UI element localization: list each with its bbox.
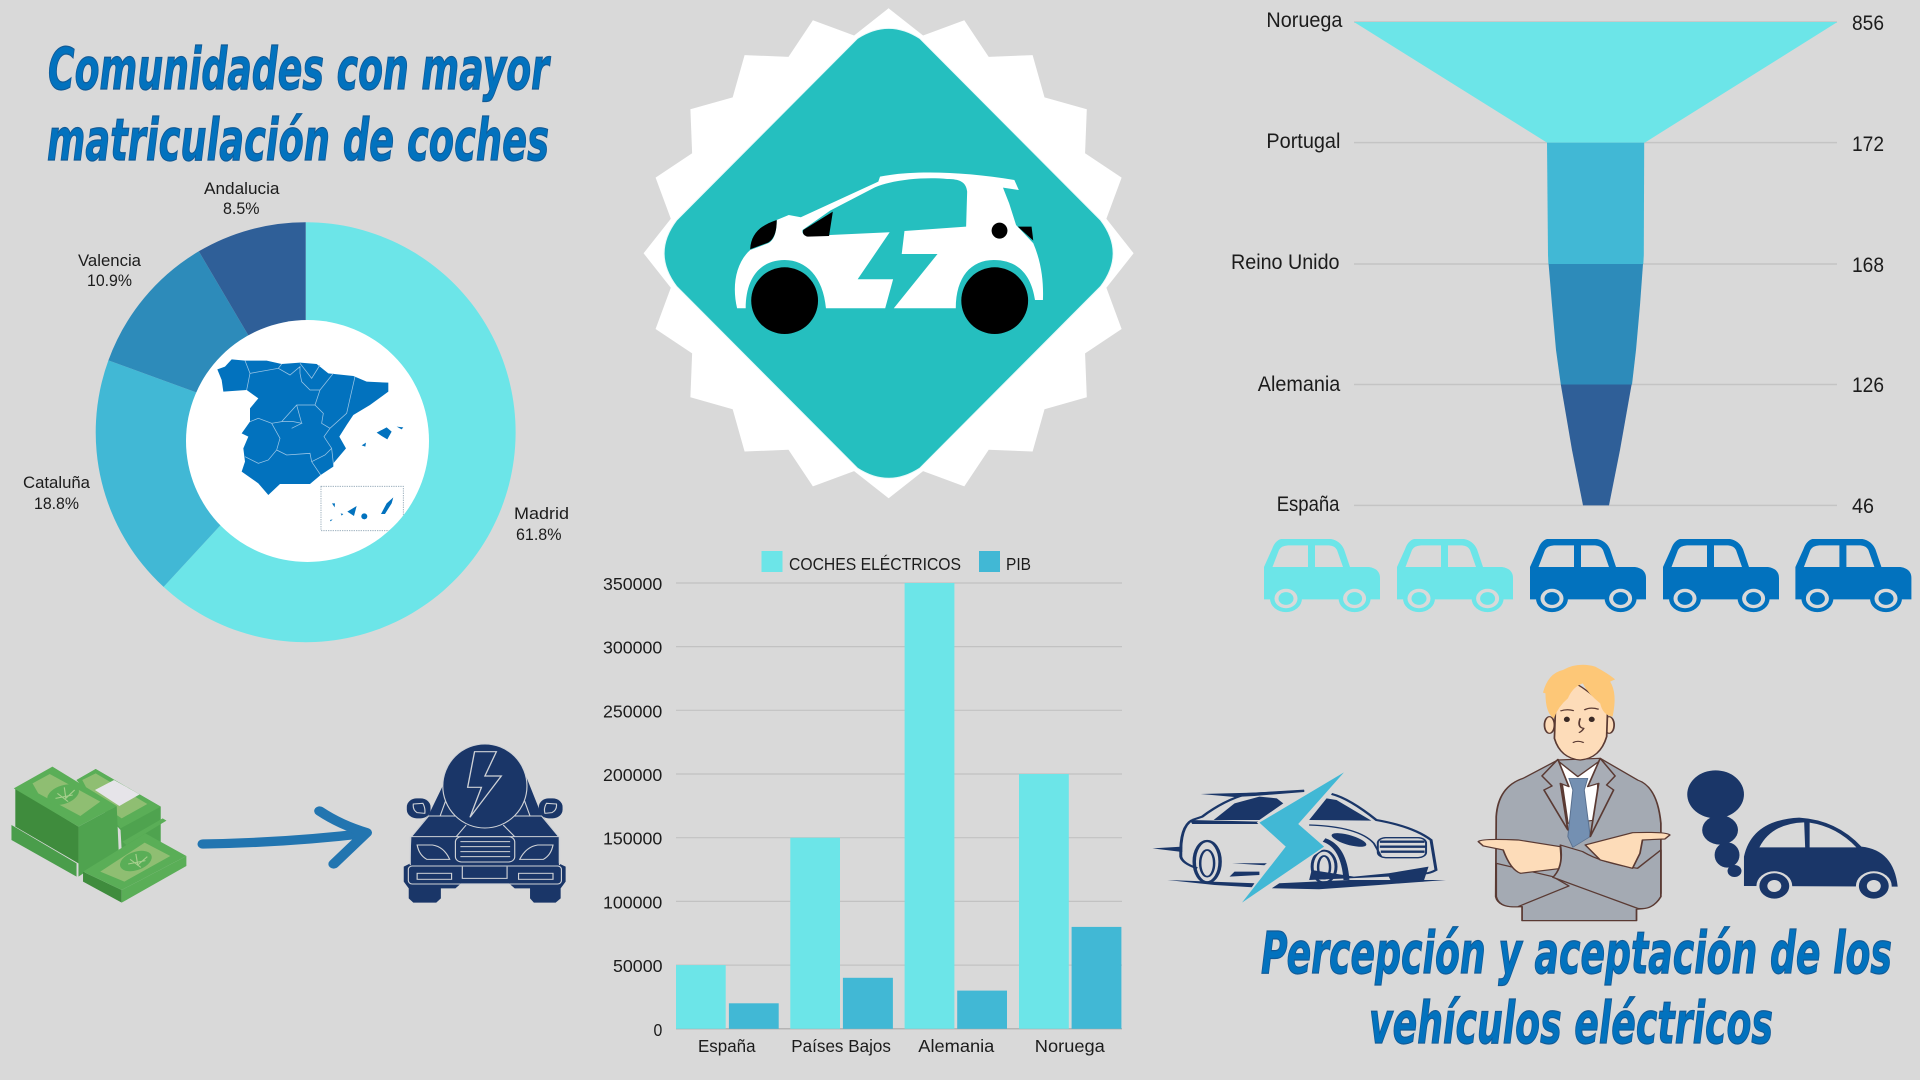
icon: electric car front <box>404 744 566 903</box>
funnel labels: España <box>1277 493 1340 516</box>
icon: money stacks <box>11 767 186 903</box>
y axis labels: 350000 <box>603 574 663 594</box>
funnel: Alemania <box>1561 384 1632 505</box>
arrow <box>203 811 367 864</box>
y axis labels: 150000 <box>603 829 663 849</box>
x axis labels: Noruega <box>1035 1036 1105 1056</box>
funnel grid lines <box>1354 22 1837 505</box>
funnel labels: Reino Unido <box>1231 251 1340 274</box>
smoke <box>1687 770 1744 877</box>
funnel values: 46 <box>1852 495 1874 518</box>
title: comunidades: Comunidades con mayor <box>48 35 551 103</box>
x axis labels: Alemania <box>918 1036 995 1056</box>
funnel: Portugal <box>1547 143 1644 264</box>
funnel labels <box>1231 9 1343 516</box>
legend <box>762 551 1031 574</box>
donut labels: 61.8% <box>516 525 562 544</box>
badge car <box>664 28 1113 478</box>
y axis labels: 300000 <box>603 638 663 658</box>
donut slice: Valencia <box>108 251 255 398</box>
x axis labels: Países Bajos <box>791 1036 891 1056</box>
y axis labels: 0 <box>654 1020 663 1040</box>
donut labels: Madrid <box>514 504 569 523</box>
bars: coches eléctricos <box>676 583 1069 1029</box>
donut labels: 10.9% <box>87 271 132 290</box>
x axis labels: España <box>698 1036 756 1056</box>
funnel values: 172 <box>1852 133 1884 156</box>
donut slice: Madrid <box>164 222 516 642</box>
donut labels: Cataluña <box>23 473 91 492</box>
title: percepción <box>1261 919 1892 1057</box>
car icon 5 <box>1795 539 1911 612</box>
title: comunidades: matriculación de coches <box>47 106 549 174</box>
y axis labels: 200000 <box>603 765 663 785</box>
map of Spain in white circle <box>186 320 429 562</box>
funnel: Reino Unido <box>1549 264 1643 384</box>
donut labels: 18.8% <box>34 494 79 513</box>
grid lines <box>676 583 1122 1029</box>
car icon 2 <box>1397 539 1513 612</box>
bar chart <box>603 551 1122 1056</box>
car <box>1744 818 1898 901</box>
title: comunidades <box>47 35 551 174</box>
funnel values: 168 <box>1852 254 1884 277</box>
donut slice: Andalucia <box>199 222 306 346</box>
donut chart: comunidades <box>23 179 569 642</box>
car icon 3 <box>1530 539 1646 612</box>
funnel values: 856 <box>1852 12 1884 35</box>
icon: electric sports car with bolt <box>1152 772 1446 903</box>
car pictogram row <box>1264 539 1911 612</box>
car icon 1 <box>1264 539 1380 612</box>
donut slices <box>96 222 516 642</box>
legend: COCHES ELÉCTRICOS <box>789 554 961 574</box>
funnel labels: Portugal <box>1266 130 1340 153</box>
car icon 4 <box>1663 539 1779 612</box>
illustration: man crossing arms <box>1478 665 1670 921</box>
funnel labels: Noruega <box>1266 9 1343 32</box>
icon: combustion car with smoke <box>1687 770 1898 901</box>
bars: PIB <box>729 927 1121 1029</box>
donut labels: Andalucia <box>204 179 280 198</box>
y axis labels <box>603 574 663 1040</box>
funnel: Noruega <box>1354 22 1837 143</box>
donut labels: 8.5% <box>223 199 260 218</box>
y axis labels: 250000 <box>603 701 663 721</box>
donut labels <box>23 179 569 544</box>
funnel values: 126 <box>1852 374 1884 397</box>
legend: PIB <box>1006 554 1031 574</box>
donut slice: Cataluña <box>96 360 236 587</box>
x axis labels <box>698 1036 1105 1056</box>
badge: electric car <box>644 8 1134 498</box>
funnel labels: Alemania <box>1258 373 1341 396</box>
y axis labels: 100000 <box>603 892 663 912</box>
funnel chart <box>1231 9 1884 518</box>
y axis labels: 50000 <box>613 956 663 976</box>
donut labels: Valencia <box>78 251 142 270</box>
funnel values <box>1852 12 1884 518</box>
badge star <box>644 8 1134 498</box>
